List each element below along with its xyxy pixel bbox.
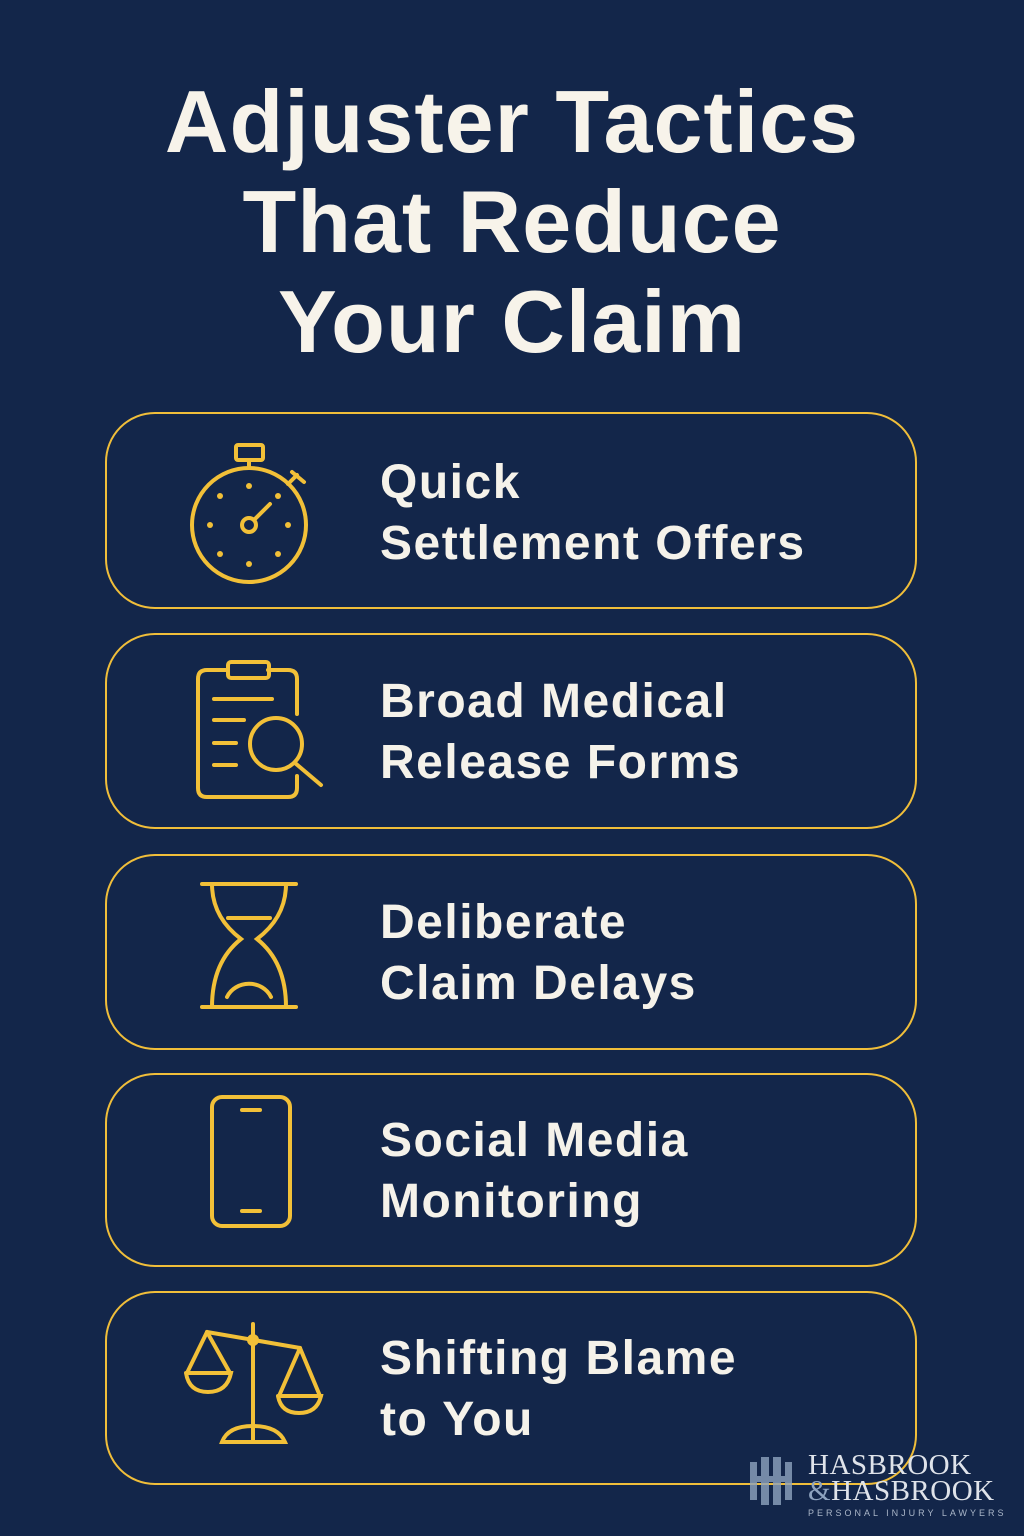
text: Deliberate [380,896,627,949]
title: Your Claim [278,272,746,371]
icon: hourglass [200,882,298,1009]
icon: scales [184,1322,324,1444]
text: Release Forms [380,736,741,789]
text: Monitoring [380,1175,643,1228]
title: Adjuster Tactics [165,72,859,171]
icon: phone [210,1095,292,1228]
title [165,72,859,371]
logo text [808,1449,995,1507]
logo text: HASBROOK [808,1449,972,1481]
logo [750,1449,1007,1518]
logo: PERSONAL INJURY LAWYERS [808,1508,1007,1518]
text [380,456,806,570]
panel: medical release [105,633,917,829]
text [380,1332,737,1446]
text: Broad Medical [380,675,728,728]
text: Shifting Blame [380,1332,737,1385]
text: to You [380,1393,534,1446]
logo mark [750,1457,792,1505]
panel: shifting blame [105,1291,917,1485]
text: Social Media [380,1114,689,1167]
text: Claim Delays [380,957,697,1010]
text: Settlement Offers [380,517,806,570]
panel: quick settlement [105,412,917,609]
panel: claim delays [105,854,917,1050]
panel: social media [105,1073,917,1267]
text [380,896,697,1010]
logo text: &HASBROOK [808,1475,995,1507]
icon: stopwatch [190,443,308,584]
text [380,1114,689,1228]
text [380,675,741,789]
text: Quick [380,456,521,509]
icon: clipboard [196,660,324,799]
title: That Reduce [242,172,782,271]
